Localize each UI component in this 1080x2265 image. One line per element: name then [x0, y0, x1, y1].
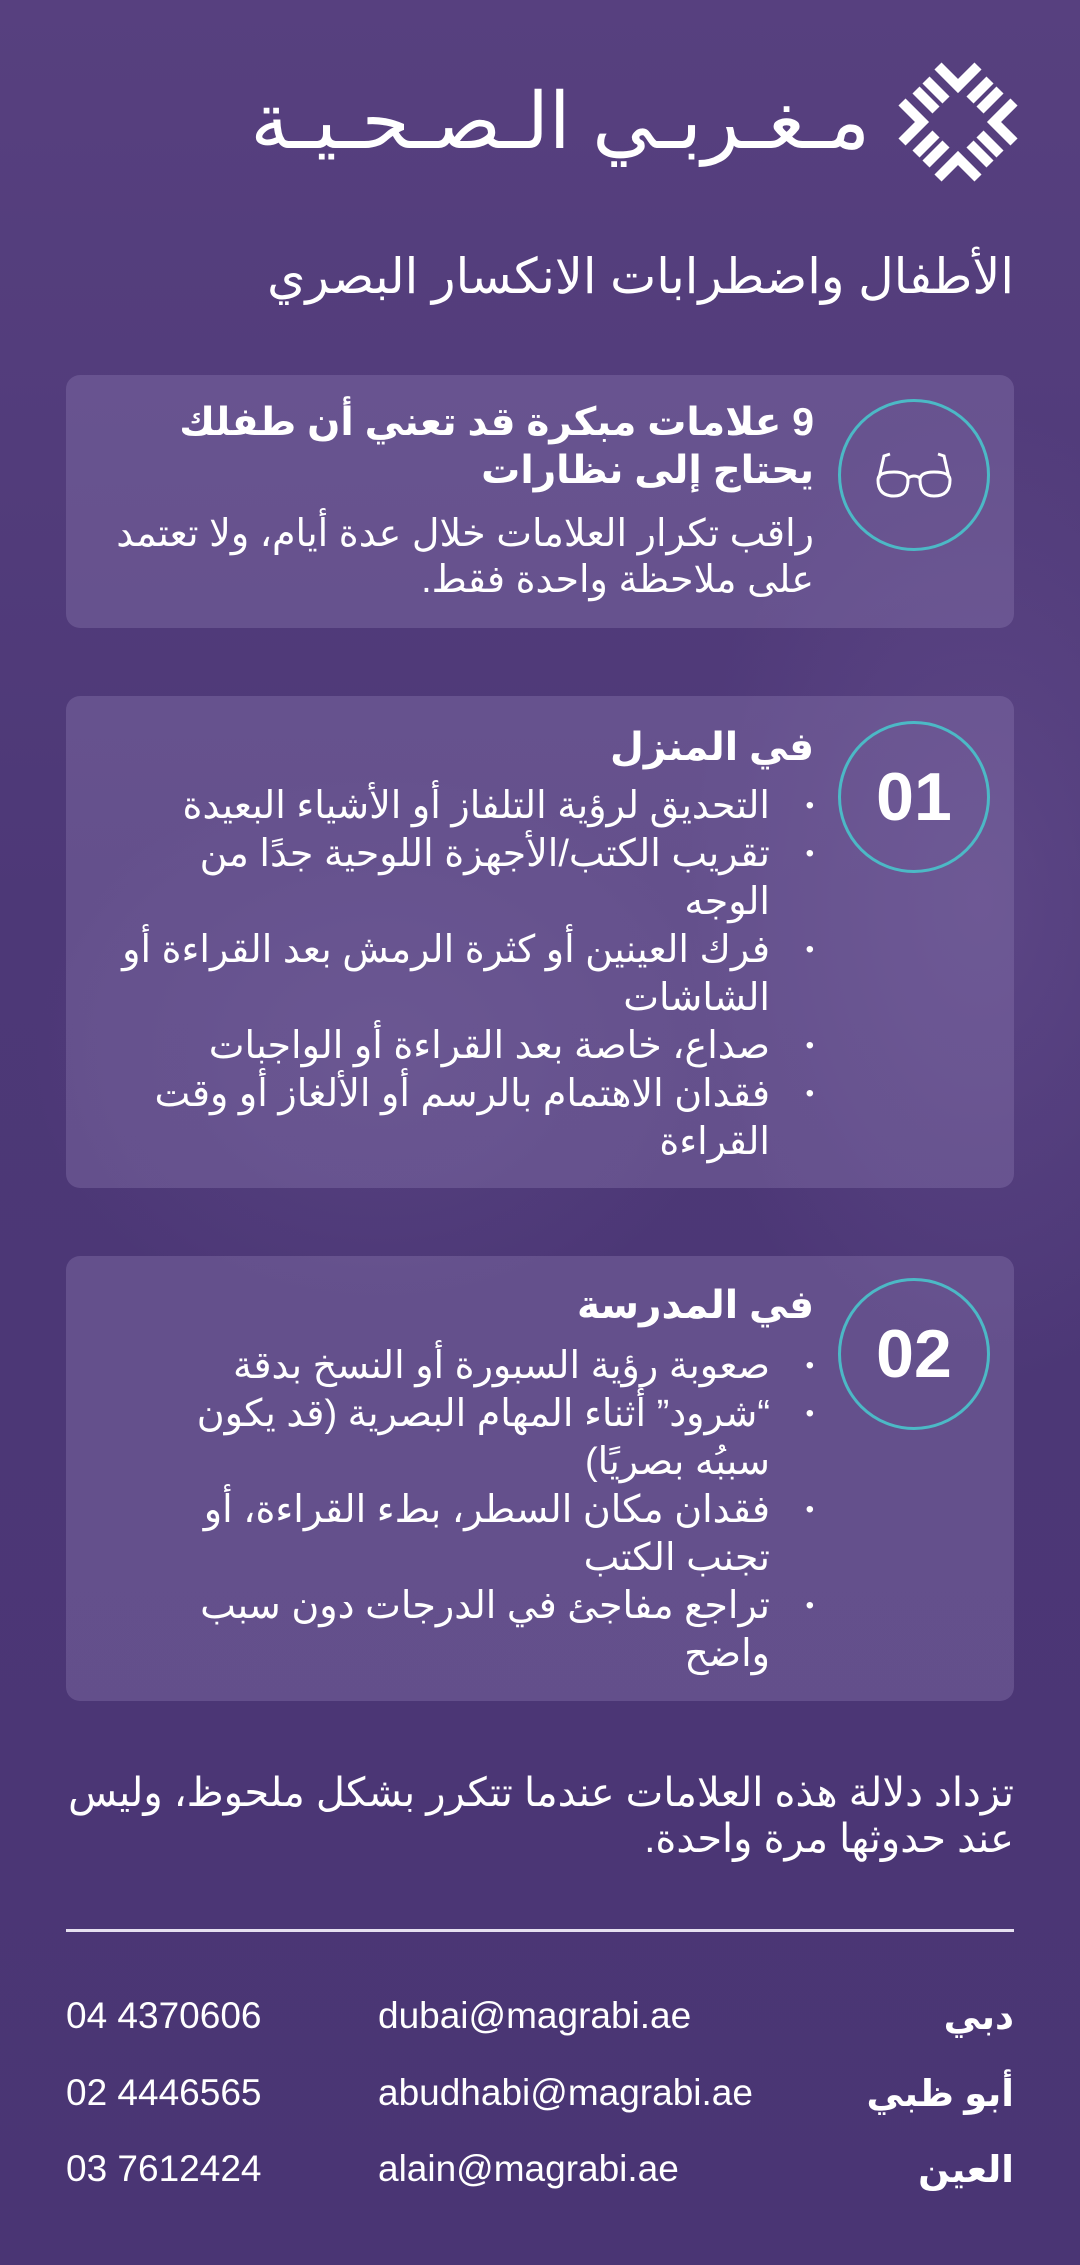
home list: فرك العينين أو كثرة الرمش بعد القراءة أو الشاشات — [122, 929, 770, 1019]
contact: al ain: العين — [918, 2149, 1014, 2190]
panel: intro — [66, 375, 1014, 628]
icon: logo mark — [898, 62, 1018, 182]
home list — [120, 780, 814, 1164]
contact: dubai: dubai@magrabi.ae — [378, 1995, 691, 2036]
contact: abu dhabi: 02 4446565 — [66, 2072, 261, 2113]
school list: تراجع مفاجئ في الدرجات دون سبب واضح — [200, 1585, 770, 1675]
contacts — [66, 1995, 1014, 2191]
home heading: في المنزل — [610, 726, 814, 769]
footer note: عند حدوثها مرة واحدة. — [644, 1817, 1014, 1861]
number badge 01 — [838, 721, 990, 873]
intro body — [116, 508, 814, 602]
title: الأطفال واضطرابات الانكسار البصري — [267, 250, 1014, 304]
intro heading: يحتاج إلى نظارات — [481, 449, 814, 492]
contact: abu dhabi: أبو ظبي — [867, 2073, 1014, 2114]
panel: at school — [66, 1256, 1014, 1701]
footer note — [68, 1771, 1014, 1862]
logo — [250, 62, 1018, 182]
intro heading — [179, 396, 814, 493]
contact: abu dhabi: abudhabi@magrabi.ae — [378, 2072, 753, 2113]
contact: al ain — [66, 2148, 1014, 2191]
number badge 01: 01 — [876, 759, 952, 835]
intro body: راقب تكرار العلامات خلال عدة أيام، ولا تعتمد — [116, 513, 814, 555]
intro heading: 9 علامات مبكرة قد تعني أن طفلك — [179, 401, 814, 444]
intro body: على ملاحظة واحدة فقط. — [421, 559, 814, 601]
school heading: في المدرسة — [577, 1284, 814, 1327]
contact: dubai: 04 4370606 — [66, 1995, 261, 2036]
logo text: مـغـربـي الـصـحـيـة — [250, 77, 870, 165]
home list: صداع، خاصة بعد القراءة أو الواجبات — [209, 1025, 770, 1067]
contact: al ain: alain@magrabi.ae — [378, 2148, 679, 2189]
contact: al ain: 03 7612424 — [66, 2148, 261, 2189]
footer note: تزداد دلالة هذه العلامات عندما تتكرر بشكل ملحوظ، وليس — [68, 1771, 1014, 1815]
panel: at home — [66, 696, 1014, 1188]
school list: فقدان مكان السطر، بطء القراءة، أو تجنب الكتب — [204, 1489, 770, 1579]
contact: dubai — [66, 1995, 1014, 2038]
school list: صعوبة رؤية السبورة أو النسخ بدقة — [233, 1345, 770, 1387]
home list: التحديق لرؤية التلفاز أو الأشياء البعيدة — [183, 785, 770, 827]
contact: dubai: دبي — [944, 1996, 1014, 2037]
school list: “شرود” أثناء المهام البصرية (قد يكون سببُه بصريًا) — [197, 1393, 770, 1483]
school list — [197, 1340, 814, 1676]
home list: فقدان الاهتمام بالرسم أو الألغاز أو وقت القراءة — [154, 1073, 770, 1163]
number badge 02 — [838, 1278, 990, 1430]
contact: abu dhabi — [66, 2069, 1014, 2115]
home list: تقريب الكتب/الأجهزة اللوحية جدًا من الوجه — [200, 833, 770, 923]
number badge 02: 02 — [876, 1316, 952, 1392]
icon: glasses — [838, 399, 990, 551]
